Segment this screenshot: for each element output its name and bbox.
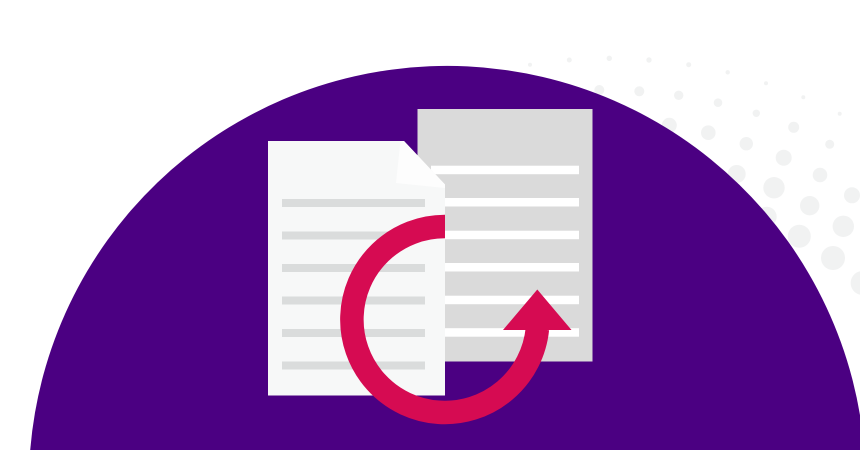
circular arrow: [352, 226, 572, 412]
dot pattern background: [528, 56, 860, 295]
page fold: [396, 141, 445, 188]
back document: [418, 109, 592, 362]
front document: [268, 141, 445, 396]
